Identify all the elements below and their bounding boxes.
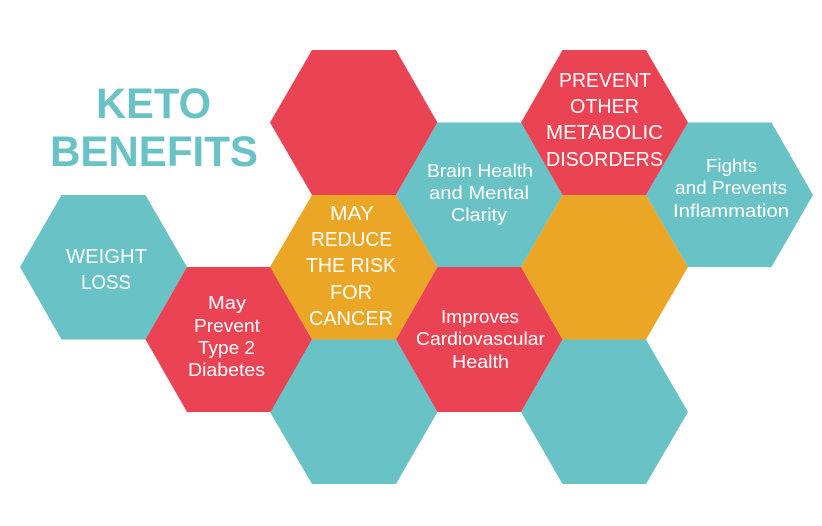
hexagon: fights and prevents inflammation: and Prevents xyxy=(675,177,787,198)
hexagon: may prevent type 2 diabetes: Prevent xyxy=(194,315,260,336)
hexagon: brain health and mental clarity: Clarity xyxy=(451,204,508,225)
title: Keto Benefits: BENEFITS xyxy=(50,128,258,176)
hexagon: right orange, empty xyxy=(521,195,688,340)
hexagon: may reduce the risk for cancer xyxy=(270,195,438,340)
hexagon: may prevent type 2 diabetes: May xyxy=(208,292,247,313)
hexagon: brain health and mental clarity: and Mental xyxy=(429,182,529,203)
hexagon: fights and prevents inflammation: Inflammation xyxy=(673,200,789,221)
hexagon: improves cardiovascular health: Improves xyxy=(441,306,519,327)
hexagon: may reduce the risk for cancer: MAY xyxy=(330,203,374,225)
hexagon: may reduce the risk for cancer: REDUCE xyxy=(311,229,392,251)
hexagon: brain health and mental clarity xyxy=(396,122,562,267)
hexagon: prevent other metabolic disorders xyxy=(521,50,688,195)
hexagon: improves cardiovascular health xyxy=(396,267,562,412)
hexagon: brain health and mental clarity: Brain Health xyxy=(427,160,533,181)
hexagon: weight loss: LOSS xyxy=(81,272,131,294)
hexagon: fights and prevents inflammation xyxy=(646,122,813,267)
title: Keto Benefits xyxy=(50,80,258,176)
hexagon: bottom right teal, empty xyxy=(521,340,688,484)
hexagon: fights and prevents inflammation: Fights xyxy=(706,155,757,176)
hexagon: may reduce the risk for cancer: CANCER xyxy=(309,308,393,330)
hexagon: prevent other metabolic disorders: OTHER xyxy=(570,96,639,118)
hexagon: prevent other metabolic disorders: METABOLIC xyxy=(546,122,663,144)
hexagon: prevent other metabolic disorders: PREVENT xyxy=(559,70,651,92)
hexagon: prevent other metabolic disorders: DISORDERS xyxy=(546,149,663,171)
title: Keto Benefits: KETO xyxy=(96,80,211,128)
hexagon: improves cardiovascular health: Health xyxy=(452,351,509,372)
hexagon: may prevent type 2 diabetes: Type 2 xyxy=(198,337,255,358)
hexagon: improves cardiovascular health: Cardiovascular xyxy=(416,328,545,349)
hexagon: may reduce the risk for cancer: THE RISK xyxy=(306,255,397,277)
hexagon: top red, empty xyxy=(270,50,438,195)
hexagon: weight loss xyxy=(20,195,187,340)
hexagon: weight loss: WEIGHT xyxy=(66,246,147,268)
hexagon: may reduce the risk for cancer: FOR xyxy=(330,282,372,304)
hexagon: may prevent type 2 diabetes xyxy=(146,267,312,412)
hexagon: bottom teal, empty xyxy=(270,340,438,484)
hexagon: may prevent type 2 diabetes: Diabetes xyxy=(188,359,265,380)
